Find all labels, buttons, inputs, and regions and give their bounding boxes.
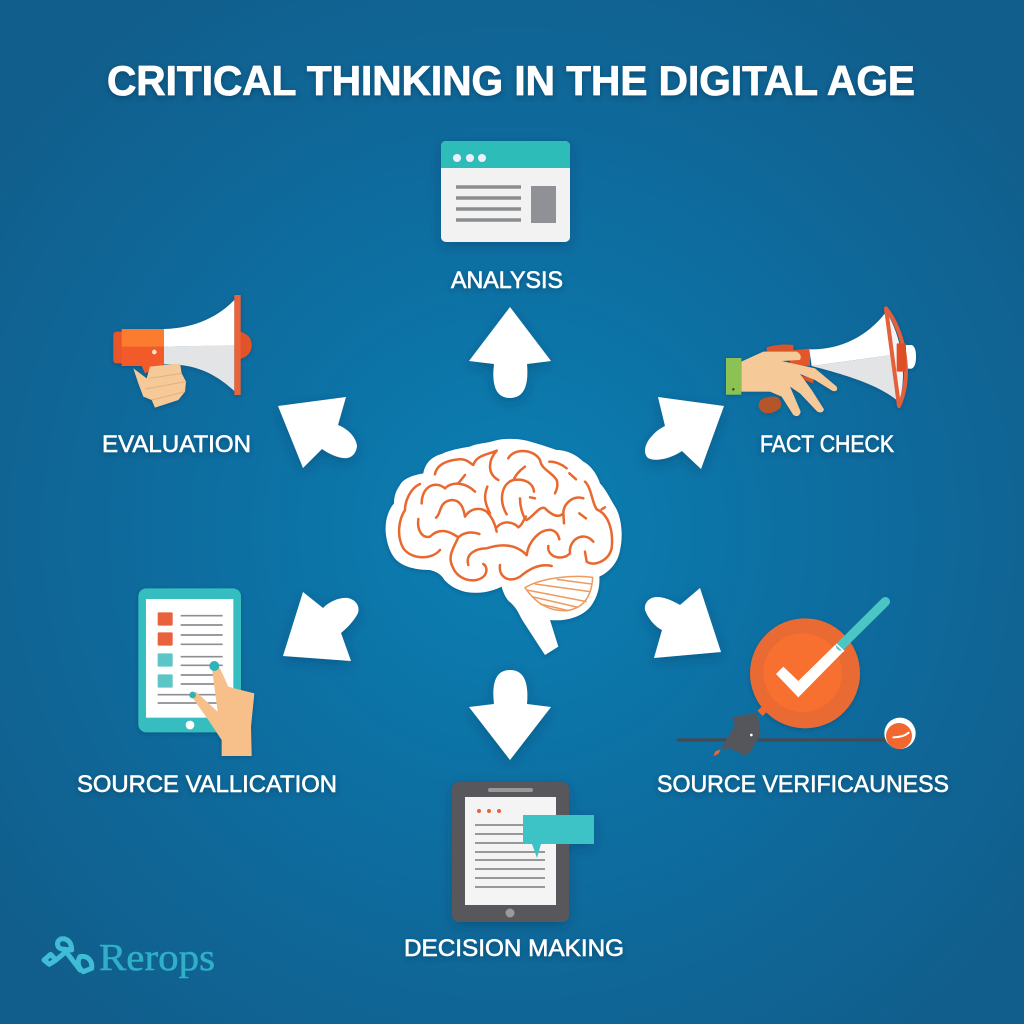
- icon: megaphone with fist: [113, 295, 252, 408]
- arrow: toward source verification: [645, 588, 721, 658]
- label: source validation: SOURCE VALLICATION: [77, 771, 337, 798]
- label: source verification: SOURCE VERIFICAUNESS: [657, 771, 949, 798]
- arrow: toward fact check: [645, 397, 724, 469]
- arrow: down to decision making: [469, 670, 551, 760]
- icon: browser window: [441, 141, 570, 242]
- logo mark: [44, 939, 92, 972]
- pen tip: [760, 701, 774, 713]
- label: decision making: DECISION MAKING: [404, 935, 624, 962]
- label: evaluation: EVALUATION: [102, 431, 251, 458]
- marker dot: [884, 718, 916, 749]
- baseline: [678, 735, 888, 745]
- badge: [750, 618, 860, 728]
- icon: tablet checklist with hand: [138, 588, 254, 756]
- pen: [841, 602, 885, 646]
- arrow: up to analysis: [469, 307, 551, 398]
- logo: [44, 937, 215, 979]
- brain silhouette: [386, 439, 622, 655]
- check mark: [776, 645, 843, 697]
- icon: hand holding megaphone: [726, 308, 916, 416]
- title: CRITICAL THINKING IN THE DIGITAL AGE: [107, 57, 915, 104]
- icon: tablet with speech bubble: [452, 782, 594, 922]
- label: analysis: ANALYSIS: [451, 267, 563, 294]
- icon: brain: [386, 439, 622, 655]
- arrow: toward source validation: [283, 592, 359, 661]
- logo wordmark: Rerops: [99, 937, 215, 979]
- label: fact check: FACT CHECK: [760, 431, 894, 458]
- icon: check badge with pen: [678, 602, 916, 756]
- cerebellum: [525, 576, 593, 611]
- arrow: toward evaluation: [278, 397, 357, 468]
- brain folds: [399, 451, 612, 580]
